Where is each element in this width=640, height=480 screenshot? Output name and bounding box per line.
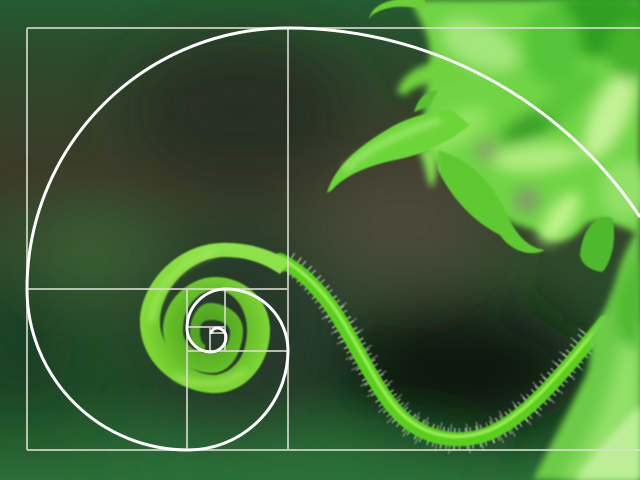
hanging leaf tips [438, 150, 545, 253]
tendril: coil [140, 243, 290, 393]
small leaves, left of mass [397, 63, 470, 95]
tendril: stem hairs [288, 262, 590, 439]
small leaf, top edge [369, 0, 425, 19]
foliage: blurred leaf mass, top right [327, 0, 640, 253]
sharp leaf pointing lower left [327, 110, 470, 193]
tendril: stem [280, 258, 605, 439]
foliage: right side stalk, bottom right [533, 217, 640, 480]
